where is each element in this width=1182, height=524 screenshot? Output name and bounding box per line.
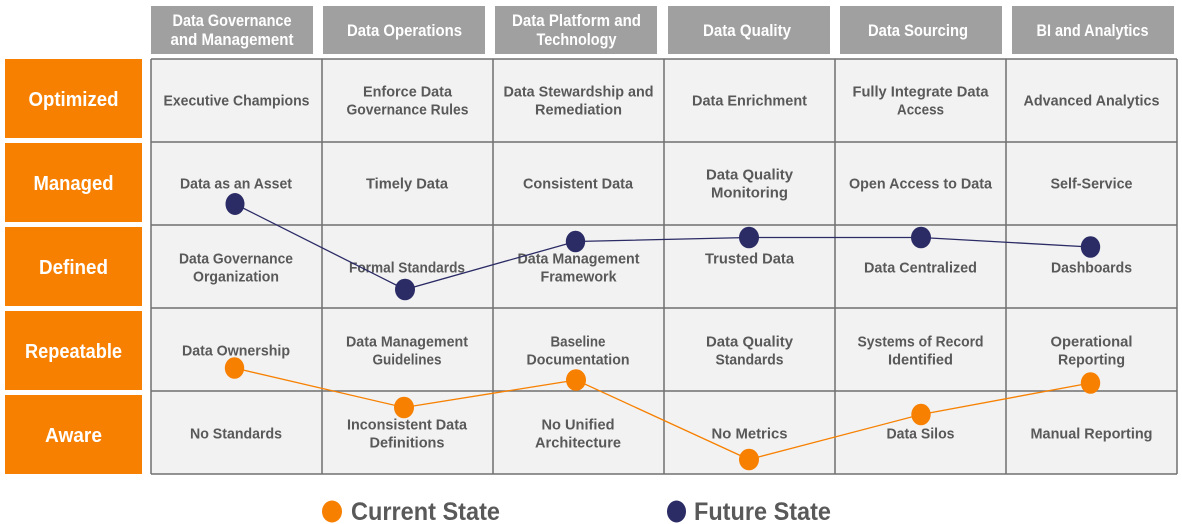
level: Managed: Managed xyxy=(34,173,114,195)
header: BI and Analytics: BI and Analytics xyxy=(1036,21,1148,40)
cell text: Repeatable row: Operational xyxy=(1050,334,1132,350)
current state line with markers xyxy=(225,357,1100,470)
cell text: Defined row: Trusted Data xyxy=(705,250,795,268)
cell text: Repeatable row: Reporting xyxy=(1058,352,1125,368)
future state line with markers xyxy=(226,193,1100,300)
cell text: Optimized row xyxy=(164,84,1160,118)
cell text: Defined row: Framework xyxy=(540,268,617,286)
cell text: Aware row: No Metrics xyxy=(712,426,788,442)
header: Data Platform and Technology xyxy=(495,6,657,54)
cell text: Managed row: Monitoring xyxy=(711,184,788,202)
cell text: Repeatable row xyxy=(182,334,1132,368)
level: Defined: Defined xyxy=(39,257,108,279)
cell text: Repeatable row: Data Management xyxy=(346,334,468,350)
cell text: Defined row xyxy=(179,250,1132,286)
header: BI and Analytics xyxy=(1012,6,1174,54)
cell text: Defined row: Formal Standards xyxy=(349,260,465,276)
level: Repeatable xyxy=(5,311,142,390)
header: Data Operations xyxy=(323,6,485,54)
grid background xyxy=(151,59,1177,474)
cell text: Managed row: Data as an Asset xyxy=(180,176,292,192)
level: Managed xyxy=(5,143,142,222)
cell text: Aware row: No Unified xyxy=(542,416,614,434)
header: Data Governance and Management: Data Governance xyxy=(172,11,292,30)
maturity level labels xyxy=(5,59,142,474)
cell text: Aware row: Definitions xyxy=(370,434,444,452)
cell text: Aware row: Inconsistent Data xyxy=(347,416,468,434)
cell text: Repeatable row: Guidelines xyxy=(372,352,442,368)
level: Repeatable: Repeatable xyxy=(25,341,122,363)
header: Data Governance and Management: and Management xyxy=(170,30,294,49)
level: Aware xyxy=(5,395,142,474)
cell text: Defined row: Data Governance xyxy=(179,250,293,268)
cell text: Managed row: Timely Data xyxy=(366,176,449,192)
level: Aware: Aware xyxy=(45,425,102,447)
cell text: Aware row: Manual Reporting xyxy=(1030,426,1152,442)
cell text: Defined row: Data Centralized xyxy=(864,260,977,276)
cell text: Defined row: Organization xyxy=(193,268,279,286)
column headers xyxy=(151,6,1174,54)
cell text: Aware row: Data Silos xyxy=(886,426,954,442)
cell text: Managed row: Consistent Data xyxy=(523,176,634,192)
cell text: Repeatable row: Standards xyxy=(716,352,784,368)
cell text: Repeatable row: Data Quality xyxy=(706,334,794,350)
header: Data Sourcing: Data Sourcing xyxy=(868,21,968,40)
cell text: Optimized row: Enforce Data xyxy=(363,84,453,100)
header: Data Platform and Technology: Data Platform and xyxy=(512,11,641,30)
header: Data Sourcing xyxy=(840,6,1002,54)
cell text: Repeatable row: Identified xyxy=(888,352,953,368)
cell text: Repeatable row: Systems of Record xyxy=(858,334,984,350)
header: Data Quality xyxy=(668,6,830,54)
cell text: Repeatable row: Data Ownership xyxy=(182,342,290,360)
header: Data Operations: Data Operations xyxy=(347,21,462,40)
cell text: Managed row: Open Access to Data xyxy=(849,176,993,192)
cell text: Aware row: No Standards xyxy=(190,426,282,442)
cell text: Optimized row: Executive Champions xyxy=(164,92,310,110)
cell text: Aware row: Architecture xyxy=(535,434,621,452)
level: Optimized: Optimized xyxy=(28,89,118,111)
cell text: Optimized row: Access xyxy=(897,102,944,118)
cell text: Managed row: Self-Service xyxy=(1050,176,1132,192)
cell text: Aware row xyxy=(190,416,1152,452)
cell text: Optimized row: Advanced Analytics xyxy=(1024,92,1160,110)
cell text: Defined row: Data Management xyxy=(518,250,640,268)
cell text: Optimized row: Fully Integrate Data xyxy=(852,84,989,100)
cell text: Defined row: Dashboards xyxy=(1051,260,1132,276)
header: Data Quality: Data Quality xyxy=(703,21,791,40)
cell text: Repeatable row: Baseline xyxy=(550,334,606,350)
cell text: Managed row xyxy=(180,166,1132,202)
cell text: Optimized row: Data Enrichment xyxy=(692,92,807,110)
level: Optimized xyxy=(5,59,142,138)
cell text: Repeatable row: Documentation xyxy=(526,352,630,368)
cell text: Optimized row: Data Stewardship and xyxy=(504,84,654,100)
cell text: Optimized row: Governance Rules xyxy=(346,102,468,118)
header: Data Governance and Management xyxy=(151,6,313,54)
cell text: Managed row: Data Quality xyxy=(706,166,794,184)
level: Defined xyxy=(5,227,142,306)
cell text: Optimized row: Remediation xyxy=(535,102,622,118)
header: Data Platform and Technology: Technology xyxy=(536,30,617,49)
